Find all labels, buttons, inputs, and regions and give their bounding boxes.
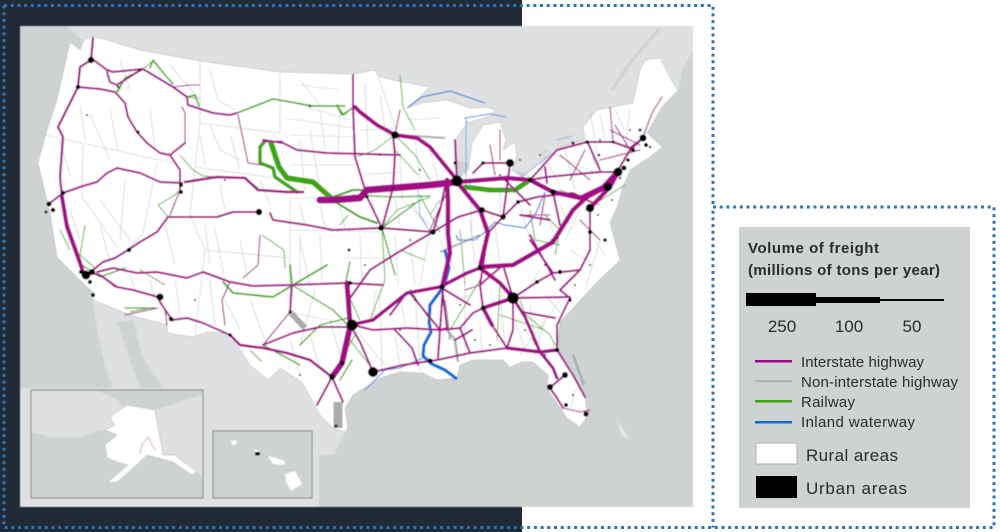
legend key: railway <box>755 394 856 411</box>
thin interstates <box>100 85 662 412</box>
legend key: inland waterway: Inland waterway <box>801 414 916 431</box>
Alaska land <box>105 405 197 483</box>
Alaska freight road <box>140 437 155 454</box>
highest volume corridor <box>320 182 457 200</box>
state boundaries and minor roads <box>45 60 630 410</box>
railways major <box>82 60 527 380</box>
scale labels: 100 <box>835 317 863 336</box>
Mexico landmass <box>20 300 345 507</box>
Gulf of California <box>117 320 163 388</box>
legend panel <box>739 227 970 508</box>
legend title <box>748 240 940 279</box>
Canada landmass <box>66 26 693 180</box>
medium interstates <box>50 58 643 408</box>
contiguous United States land <box>38 36 678 432</box>
inset: Hawaii <box>213 431 312 498</box>
Hawaii map frame <box>213 431 312 498</box>
legend key: interstate highway: Interstate highway <box>801 354 924 371</box>
ocean background <box>20 26 693 507</box>
legend key: rural areas <box>756 443 898 465</box>
legend key: non-interstate highway: Non-interstate highway <box>801 374 958 391</box>
heavy interstates <box>58 38 618 378</box>
Canada land <box>155 395 202 478</box>
scale labels <box>768 317 921 336</box>
Honolulu urban area <box>255 452 260 456</box>
Alaska map frame <box>31 390 203 498</box>
legend key: rural areas: Rural areas <box>806 446 898 465</box>
scale labels: 50 <box>903 317 921 336</box>
dark backing panel <box>0 0 522 532</box>
Bahamas <box>617 420 629 440</box>
Saint Lawrence river <box>612 28 660 90</box>
urban areas <box>44 57 651 428</box>
legend key: urban areas: Urban areas <box>806 479 907 498</box>
non-interstate highways <box>66 135 584 428</box>
inland waterways <box>365 91 572 390</box>
legend key: railway: Railway <box>801 394 856 411</box>
legend key: urban areas <box>756 476 907 498</box>
map panel <box>20 26 693 507</box>
scale labels: 250 <box>768 317 796 336</box>
legend background <box>739 227 970 508</box>
legend title: (millions of tons per year) <box>748 262 940 279</box>
Hawaiian islands <box>231 440 302 491</box>
freight width scale bar <box>746 293 944 306</box>
minor railway lines <box>60 61 625 380</box>
legend title: Volume of freight <box>748 240 879 257</box>
interstate highways <box>50 38 662 412</box>
Russia land <box>32 391 135 437</box>
inset: Alaska <box>31 390 203 498</box>
